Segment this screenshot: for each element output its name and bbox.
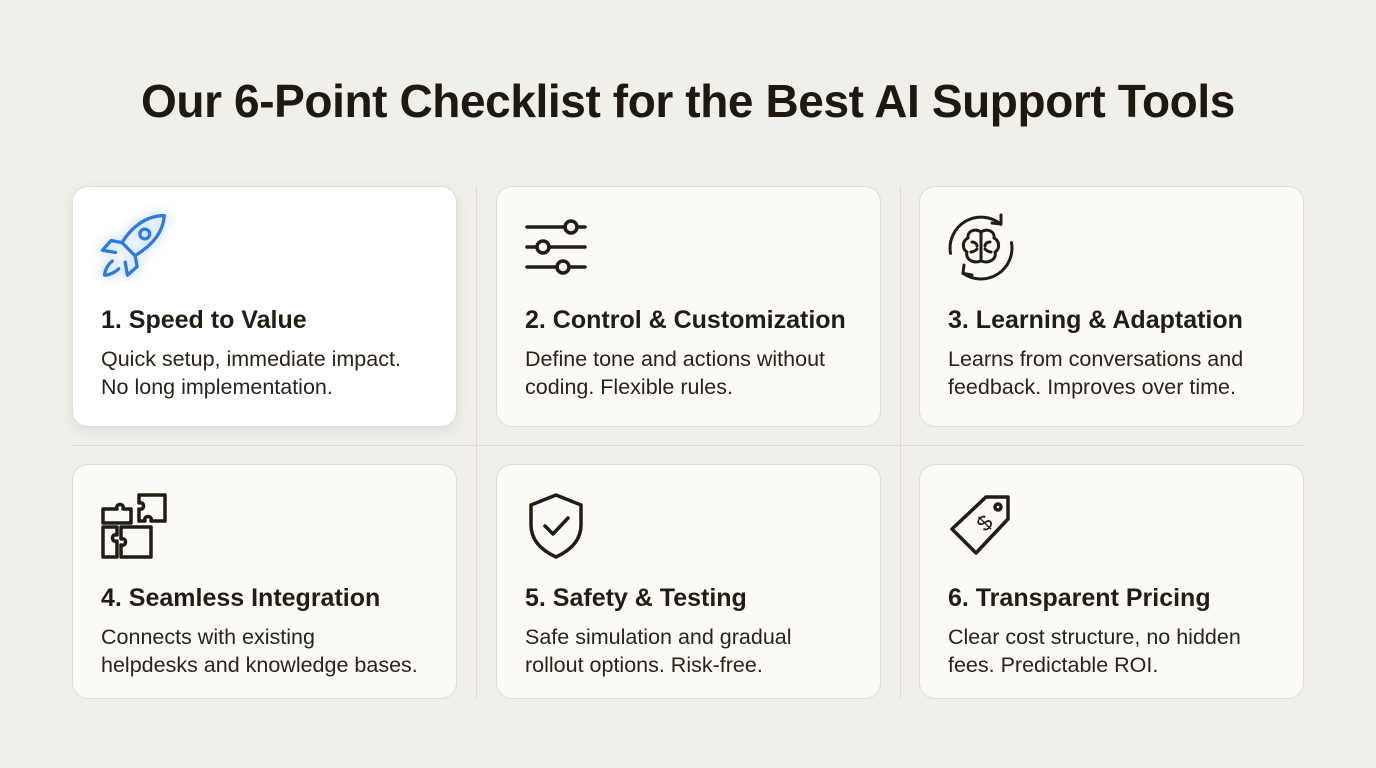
text xyxy=(948,625,1241,677)
text xyxy=(525,347,825,399)
text xyxy=(101,625,418,677)
heading: 5. Safety & Testing xyxy=(525,584,747,612)
text xyxy=(948,347,1243,399)
text: Clear cost structure, no hidden xyxy=(948,625,1241,649)
text xyxy=(101,347,401,399)
heading: 6. Transparent Pricing xyxy=(948,584,1211,612)
icon: rocket xyxy=(96,208,172,282)
icon: puzzle xyxy=(101,493,167,559)
panel: speed to value xyxy=(72,186,457,427)
text: Define tone and actions without xyxy=(525,347,825,371)
text: No long implementation. xyxy=(101,375,333,399)
panel: learning xyxy=(919,186,1304,427)
title: Our 6-Point Checklist for the Best AI Support Tools xyxy=(141,75,1235,127)
text: Learns from conversations and xyxy=(948,347,1243,371)
text: Safe simulation and gradual xyxy=(525,625,792,649)
text: Quick setup, immediate impact. xyxy=(101,347,401,371)
panel: control xyxy=(496,186,881,427)
text: coding. Flexible rules. xyxy=(525,375,733,399)
heading: 3. Learning & Adaptation xyxy=(948,306,1243,334)
text: Connects with existing xyxy=(101,625,315,649)
icon: sliders xyxy=(525,219,587,275)
text xyxy=(525,625,792,677)
text: rollout options. Risk-free. xyxy=(525,653,763,677)
icon: brain cycle xyxy=(948,214,1014,280)
heading: 4. Seamless Integration xyxy=(101,584,380,612)
panel: pricing xyxy=(919,464,1304,699)
panel: safety xyxy=(496,464,881,699)
panel: integration xyxy=(72,464,457,699)
text: feedback. Improves over time. xyxy=(948,375,1236,399)
heading: 2. Control & Customization xyxy=(525,306,846,334)
icon: price tag: $ xyxy=(972,510,998,536)
icon: price tag xyxy=(950,495,1010,555)
icon: shield xyxy=(529,493,583,559)
text: fees. Predictable ROI. xyxy=(948,653,1158,677)
heading: 1. Speed to Value xyxy=(101,306,307,334)
text: helpdesks and knowledge bases. xyxy=(101,653,418,677)
